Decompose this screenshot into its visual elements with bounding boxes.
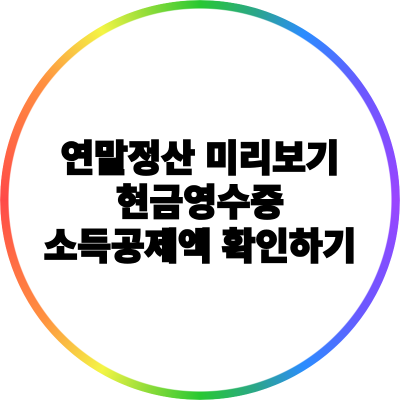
title line 2: 현금영수증 bbox=[116, 182, 284, 223]
title line 3: 소득공제액 확인하기 bbox=[44, 226, 356, 267]
title line 1: 연말정산 미리보기 bbox=[61, 138, 339, 179]
